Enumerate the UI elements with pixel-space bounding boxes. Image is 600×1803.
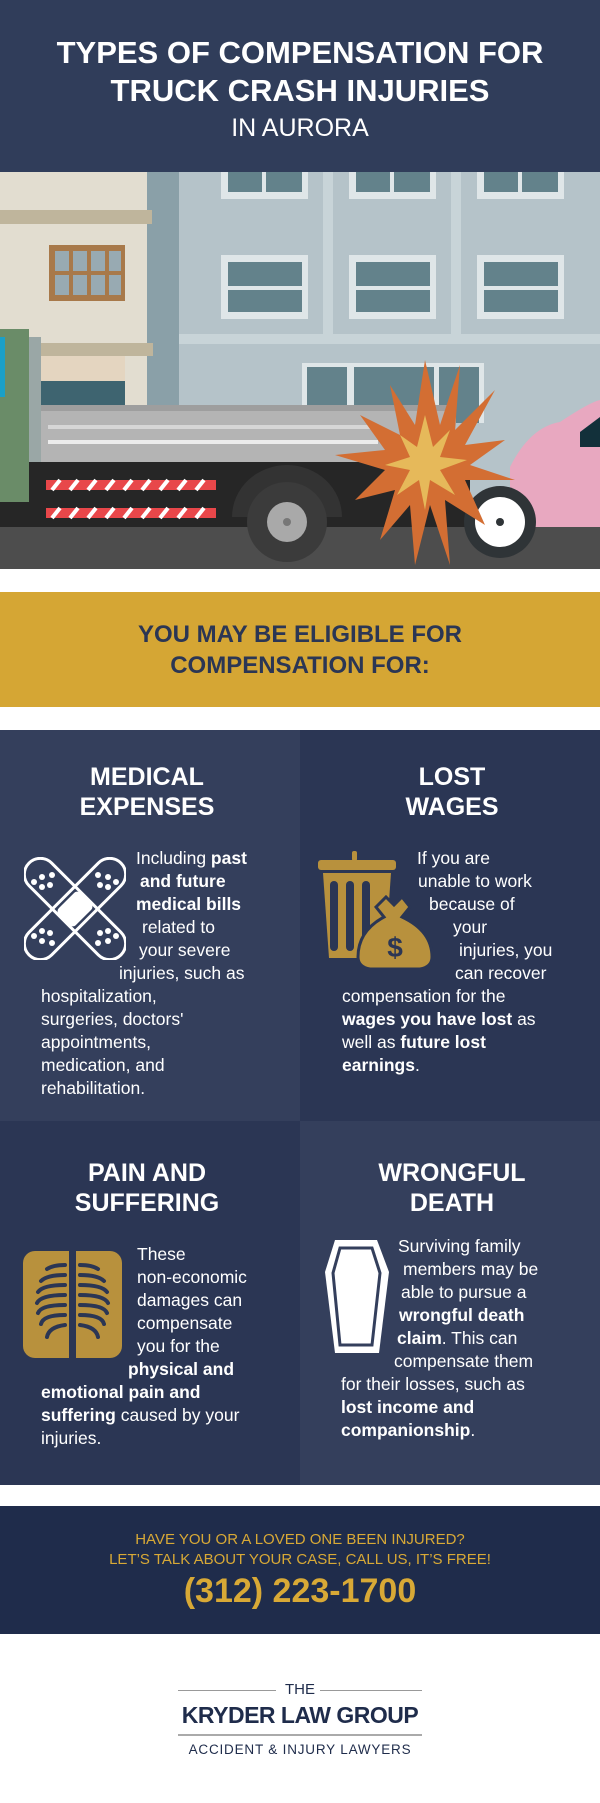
phone number: (312) 223-1700 — [184, 1572, 416, 1610]
text: pain and suffering: injuries. — [41, 1428, 101, 1448]
call to action band — [0, 1506, 600, 1634]
text: lost wages: earnings. — [342, 1055, 420, 1075]
text: wrongful death: claim. This can — [397, 1328, 517, 1348]
text: medical expenses: surgeries, doctors' — [41, 1009, 183, 1029]
text: lost wages: injuries, you — [459, 940, 552, 960]
text: lost wages: because of — [429, 894, 515, 914]
heading: pain and suffering: PAIN AND — [88, 1159, 206, 1187]
title: TYPES OF COMPENSATION FOR — [57, 35, 543, 70]
banner: eligible for compensation — [0, 592, 600, 707]
text: lost wages: can recover — [455, 963, 546, 983]
heading: wrongful death: DEATH — [410, 1189, 494, 1217]
icon: coffin — [325, 1240, 389, 1353]
text: lost wages: well as future lost — [342, 1032, 486, 1052]
text: medical expenses: rehabilitation. — [41, 1078, 145, 1098]
title — [56, 35, 543, 142]
text: pain and suffering: physical and — [128, 1359, 234, 1379]
heading: pain and suffering: SUFFERING — [75, 1189, 219, 1217]
banner: eligible for compensation: YOU MAY BE ELIGIBLE FOR — [138, 621, 462, 648]
heading: wrongful death: WRONGFUL — [378, 1159, 526, 1187]
text: medical expenses: Including past — [136, 848, 247, 868]
heading: medical expenses: MEDICAL — [90, 763, 204, 791]
text: lost wages: If you are — [417, 848, 490, 868]
text: medical expenses: injuries, such as — [119, 963, 244, 983]
text: medical expenses: appointments, — [41, 1032, 151, 1052]
text: medical expenses: your severe — [139, 940, 230, 960]
logo: the kryder law group: ACCIDENT & INJURY LAWYERS — [189, 1742, 411, 1757]
text: wrongful death: able to pursue a — [401, 1282, 527, 1302]
panel: medical expenses — [0, 730, 300, 1121]
text: pain and suffering: non-economic — [137, 1267, 247, 1287]
text: medical expenses: and future — [140, 871, 226, 891]
heading: pain and suffering — [75, 1159, 219, 1217]
text: medical expenses — [41, 848, 247, 1098]
illustration: truck crash — [0, 172, 600, 569]
text: lost wages — [342, 848, 552, 1075]
heading: wrongful death — [378, 1159, 526, 1217]
panel: wrongful death — [300, 1121, 600, 1485]
text: pain and suffering: These — [137, 1244, 186, 1264]
text: medical expenses: related to — [142, 917, 215, 937]
text: wrongful death: compensate them — [394, 1351, 533, 1371]
heading: medical expenses: EXPENSES — [80, 793, 214, 821]
text: wrongful death: for their losses, such as — [341, 1374, 525, 1394]
cta text — [109, 1531, 491, 1568]
heading: lost wages: WAGES — [405, 793, 499, 821]
icon: trash can and money bag: $ — [387, 932, 403, 963]
text: pain and suffering: you for the — [137, 1336, 220, 1356]
text: medical expenses: hospitalization, — [41, 986, 157, 1006]
text: wrongful death: lost income and — [341, 1397, 474, 1417]
logo: the kryder law group: THE — [285, 1681, 315, 1698]
text: lost wages: unable to work — [418, 871, 532, 891]
text: pain and suffering: emotional pain and — [41, 1382, 200, 1402]
text: lost wages: compensation for the — [342, 986, 505, 1006]
text: wrongful death: wrongful death — [399, 1305, 524, 1325]
banner: eligible for compensation: COMPENSATION FOR: — [170, 652, 430, 679]
text: medical expenses: medical bills — [136, 894, 241, 914]
cta text: LET’S TALK ABOUT YOUR CASE, CALL US, IT’S FREE! — [109, 1551, 491, 1568]
icon: trash can and money bag — [318, 851, 430, 968]
text: lost wages: wages you have lost as — [342, 1009, 536, 1029]
text: wrongful death: companionship. — [341, 1420, 475, 1440]
header — [0, 0, 600, 172]
panel: pain and suffering — [0, 1121, 300, 1485]
heading: lost wages: LOST — [419, 763, 485, 791]
icon: bandages — [24, 857, 126, 960]
logo: the kryder law group — [178, 1681, 422, 1757]
text: lost wages: your — [453, 917, 487, 937]
title: TRUCK CRASH INJURIES — [111, 73, 489, 108]
title: IN AURORA — [231, 114, 369, 142]
heading: medical expenses — [80, 763, 214, 821]
text: medical expenses: medication, and — [41, 1055, 165, 1075]
logo: the kryder law group: KRYDER LAW GROUP — [182, 1702, 418, 1728]
icon: rib cage — [23, 1251, 122, 1358]
heading: lost wages — [405, 763, 499, 821]
text: pain and suffering: damages can — [137, 1290, 242, 1310]
text: pain and suffering: suffering caused by your — [41, 1405, 239, 1425]
cta text: HAVE YOU OR A LOVED ONE BEEN INJURED? — [135, 1531, 465, 1548]
text: pain and suffering — [41, 1244, 247, 1448]
text: pain and suffering: compensate — [137, 1313, 232, 1333]
text: wrongful death: members may be — [403, 1259, 538, 1279]
text: wrongful death: Surviving family — [398, 1236, 521, 1256]
panel: lost wages — [300, 730, 600, 1121]
text: wrongful death — [341, 1236, 538, 1440]
